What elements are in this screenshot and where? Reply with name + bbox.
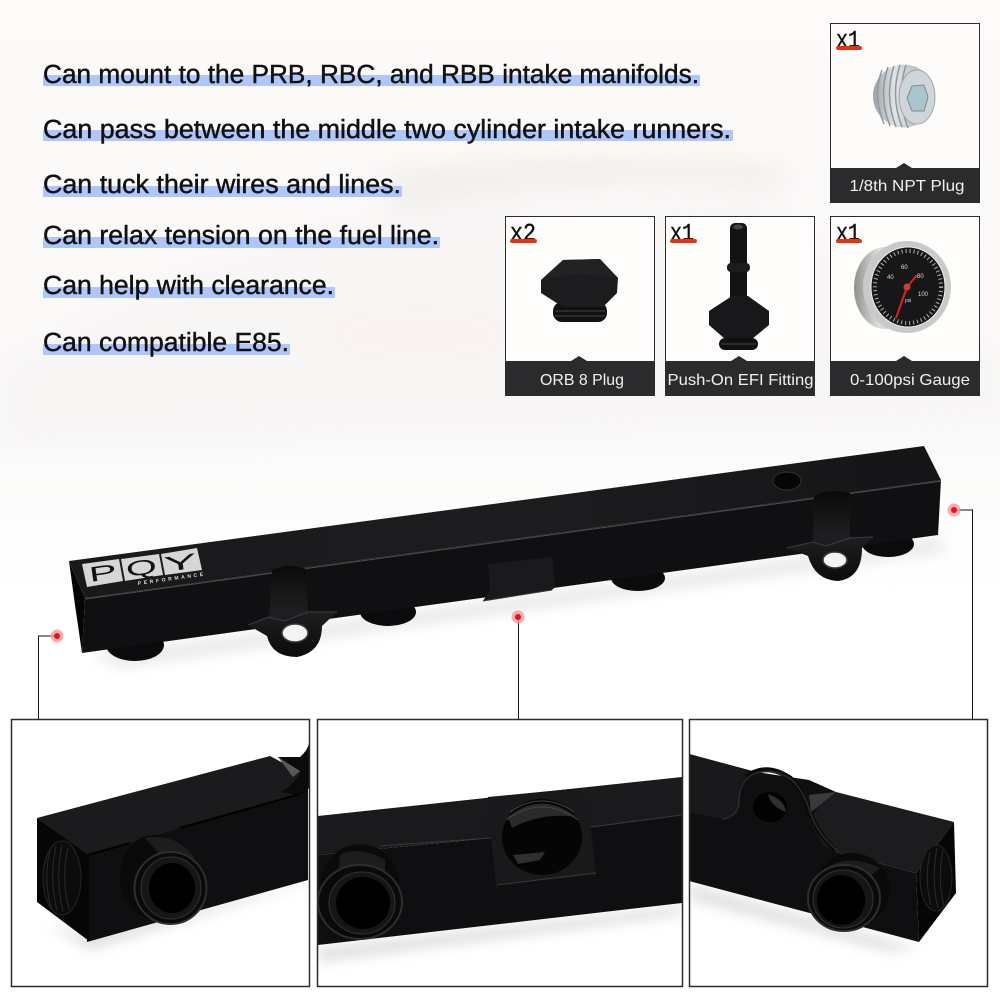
- panel: detail left end: [12, 720, 310, 986]
- quantity x1: x1: [670, 221, 694, 248]
- icon: pressure gauge: 80: [917, 274, 924, 280]
- top strip: [689, 754, 756, 819]
- icon: pressure gauge: [854, 241, 951, 333]
- top face: [37, 756, 300, 855]
- logo: PQY Performance: P: [87, 560, 118, 587]
- caption bar: [830, 356, 980, 396]
- threaded hole: [773, 472, 801, 490]
- caption bar: ORB 8 Plug: [540, 372, 624, 389]
- icon: pressure gauge: 100: [918, 292, 929, 298]
- rail top face: [318, 777, 682, 855]
- side face: [87, 788, 308, 942]
- rail side face: [318, 815, 682, 945]
- centre boss: [483, 557, 555, 601]
- caption bar: 0-100psi Gauge: [850, 372, 970, 389]
- panel: push-on EFI fitting: [665, 216, 815, 396]
- panel: 0-100psi gauge: [830, 216, 980, 396]
- end face with thread: [37, 818, 89, 941]
- icon: pressure gauge: 60: [901, 265, 908, 271]
- caption bar: [830, 163, 980, 203]
- caption bar: [665, 356, 815, 396]
- logo: PQY Performance: PERFORMANCE: [137, 572, 204, 587]
- logo: PQY Performance: [82, 548, 204, 587]
- rail top face: [69, 446, 941, 598]
- logo: PQY Performance: Q: [124, 555, 158, 582]
- panel: 1/8th NPT plug: [830, 24, 980, 203]
- callout marker: left end: [38, 630, 64, 719]
- feature line 4: Can relax tension on the fuel line.: [43, 222, 439, 250]
- icon: black octagon plug: [541, 259, 618, 322]
- quantity x1: x1: [836, 221, 860, 248]
- caption bar: 1/8th NPT Plug: [850, 178, 964, 195]
- rail ports: [106, 531, 914, 661]
- mounting lug: [722, 770, 838, 851]
- side and flange base: [689, 754, 919, 942]
- fuel rail product: [69, 446, 945, 668]
- icon: pressure gauge: 40: [887, 275, 894, 281]
- icon: black fitting: [709, 223, 769, 350]
- icon: pressure gauge: psi: [905, 298, 911, 304]
- port ring: [134, 835, 208, 925]
- threaded boss: [488, 788, 596, 890]
- rail end face: [69, 561, 85, 653]
- feature line 5: Can help with clearance.: [43, 272, 334, 300]
- callout marker: right end: [948, 504, 972, 719]
- text block: feature list: [43, 61, 733, 357]
- logo: PQY Performance: Y: [162, 550, 198, 577]
- caption bar: [505, 356, 655, 396]
- feature line 3: Can tuck their wires and lines.: [43, 171, 401, 199]
- feature line 1: Can mount to the PRB, RBC, and RBB intake manifolds.: [43, 61, 699, 89]
- top face: [809, 792, 954, 873]
- end face with thread: [916, 822, 956, 942]
- mounting lug right: [787, 491, 873, 581]
- panel: detail right end: [689, 720, 988, 986]
- port: [808, 853, 890, 931]
- caption bar: Push-On EFI Fitting: [668, 372, 814, 389]
- quantity x1: x1: [836, 28, 860, 55]
- bracket lug: [278, 743, 309, 795]
- feature line 2: Can pass between the middle two cylinder intake runners.: [43, 116, 731, 144]
- panel: ORB 8 plug: [505, 216, 655, 396]
- rail side face: [82, 480, 941, 653]
- feature line 6: Can compatible E85.: [43, 329, 289, 357]
- icon: silver plug: [873, 64, 935, 128]
- quantity x2: x2: [510, 221, 536, 248]
- callout marker: centre: [512, 610, 524, 719]
- panel: detail centre boss: [318, 720, 682, 986]
- port: [318, 844, 402, 939]
- mounting lug left: [248, 566, 337, 657]
